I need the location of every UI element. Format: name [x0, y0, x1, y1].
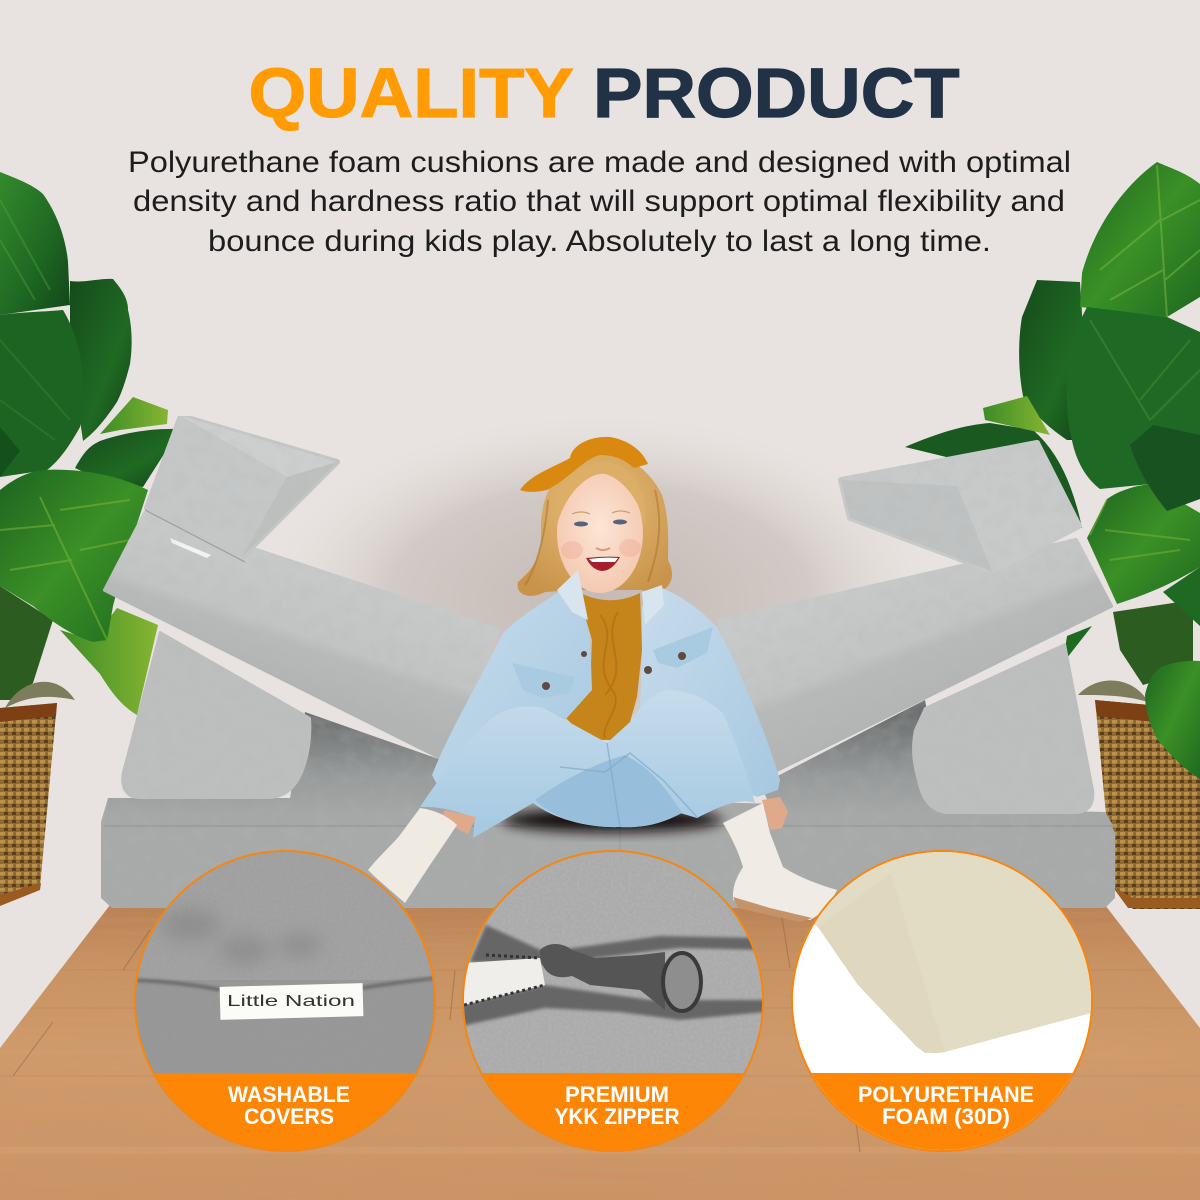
zipper white tape — [464, 958, 545, 1005]
wooden floor — [0, 905, 1200, 1200]
hair locks — [525, 490, 659, 585]
right plant — [905, 162, 1200, 909]
left big leaf — [0, 470, 148, 642]
sweater — [565, 592, 642, 740]
nose — [596, 548, 610, 550]
label tag: Little Nation — [227, 993, 355, 1010]
zipper ring — [663, 953, 701, 1011]
jeans seat shading — [535, 755, 682, 827]
circle border — [463, 851, 763, 1151]
eyes — [574, 520, 627, 526]
right moss — [1078, 681, 1148, 702]
right side leaf — [1130, 425, 1200, 511]
feature: washable covers — [135, 850, 435, 1153]
left dark leaf — [75, 429, 180, 487]
feature: polyurethane foam — [790, 850, 1095, 1153]
right back leaves — [1019, 280, 1090, 440]
orange band — [812, 1073, 1072, 1150]
right lower leaf — [1145, 661, 1200, 779]
circle border — [792, 851, 1092, 1151]
right long cushion — [719, 540, 1111, 770]
right top leaf — [1080, 162, 1200, 317]
blush — [561, 539, 641, 559]
right stems — [1113, 600, 1193, 685]
caption: PREMIUM — [565, 1082, 669, 1107]
foam photo — [814, 852, 1091, 1054]
face — [557, 473, 643, 593]
sofa recess shading — [105, 700, 1113, 825]
zipper slider — [540, 944, 665, 1010]
fabric photo — [463, 850, 763, 1075]
right flat dark leaf — [905, 423, 1082, 528]
caption: COVERS — [244, 1104, 334, 1129]
sofa — [101, 416, 1115, 908]
sofa base cushion — [101, 798, 1115, 908]
left cube cushion — [147, 416, 337, 557]
crease between cube and long cushion — [145, 510, 245, 562]
caption — [858, 1082, 1034, 1129]
orange band — [482, 1073, 744, 1150]
jacket collar — [557, 570, 664, 625]
jacket left side — [432, 592, 592, 790]
child — [368, 437, 837, 922]
left basket — [0, 703, 57, 902]
orange band — [154, 1073, 416, 1150]
caption — [228, 1082, 350, 1129]
description text: density and hardness ratio that will support optimal flexibility and — [133, 185, 1065, 218]
right boot — [723, 803, 837, 920]
bow headband — [520, 437, 648, 492]
shadow under child — [502, 808, 722, 832]
right big leaf — [1087, 484, 1200, 604]
sweater cable knit — [600, 612, 618, 738]
zipper dark tracks — [462, 925, 765, 1026]
jeans seams — [560, 743, 697, 827]
left middle leaf — [0, 310, 83, 477]
right middle leaf — [1067, 307, 1200, 489]
left boot — [368, 808, 457, 903]
left low light leaf — [60, 608, 158, 715]
fabric photo — [135, 850, 435, 1075]
white tag — [170, 538, 211, 558]
caption: FOAM (30D) — [882, 1104, 1010, 1129]
left plant stems — [0, 586, 53, 700]
left small leaf — [0, 427, 20, 477]
left plant — [0, 172, 180, 906]
left top leaf — [0, 172, 70, 315]
chest pockets — [512, 627, 713, 698]
hand and ankle — [440, 797, 788, 834]
description text — [128, 146, 1071, 258]
right light leaf — [983, 396, 1050, 435]
left light leaf — [100, 397, 168, 434]
right basket — [1095, 700, 1200, 909]
label tag — [220, 983, 363, 1020]
jeans — [420, 690, 755, 838]
left back leaves — [70, 279, 132, 441]
description text: bounce during kids play. Absolutely to last a long time. — [208, 225, 991, 258]
hair — [518, 453, 672, 596]
description text: Polyurethane foam cushions are made and designed with optimal — [128, 146, 1071, 179]
caption: YKK ZIPPER — [554, 1104, 680, 1129]
left moss — [5, 682, 75, 708]
caption: WASHABLE — [228, 1082, 350, 1107]
left long cushion — [105, 513, 498, 760]
smile — [586, 557, 620, 571]
left support block — [122, 632, 310, 798]
eyebrows — [572, 511, 630, 514]
hair fringe — [557, 462, 645, 525]
title: QUALITY PRODUCT — [248, 54, 960, 132]
caption: POLYURETHANE — [858, 1082, 1034, 1107]
jacket right side — [640, 587, 780, 797]
circle border — [135, 851, 435, 1151]
right low back leaves — [1063, 567, 1200, 663]
right support block — [913, 644, 1093, 813]
caption — [554, 1082, 680, 1129]
jacket buttons — [542, 651, 686, 690]
feature: ykk zipper — [462, 850, 765, 1153]
right cube cushion — [841, 443, 1079, 571]
